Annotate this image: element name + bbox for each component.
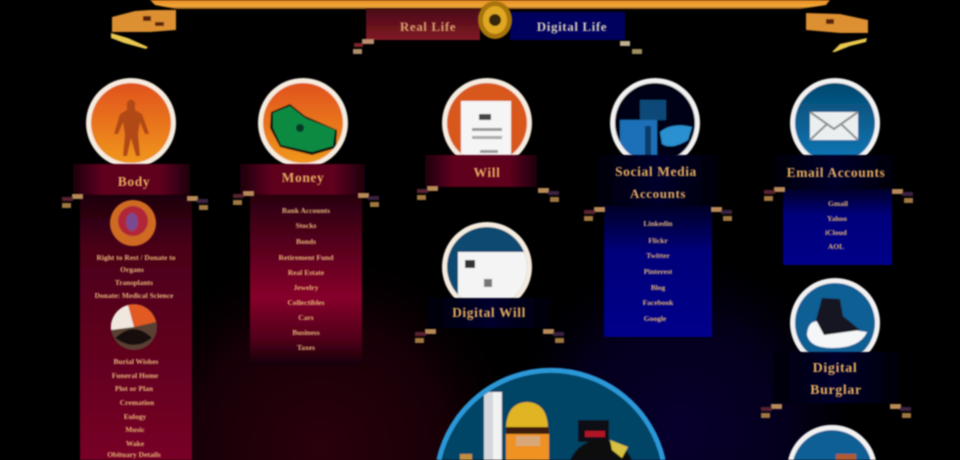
- text: money list: Bonds: [296, 237, 316, 246]
- ribbon: email accounts: [764, 155, 913, 203]
- small left figure: [460, 454, 472, 460]
- panel: will: [417, 78, 559, 202]
- text: email list: iCloud: [825, 228, 848, 237]
- icon: will document: [442, 78, 532, 168]
- icon: centre medallion: [478, 1, 512, 39]
- sword: [484, 392, 502, 460]
- ribbon: digital burglar: Digital: [813, 361, 857, 376]
- ribbon: will: Will: [474, 165, 500, 180]
- ribbon: money: Money: [282, 170, 324, 185]
- text: email list: [825, 199, 848, 251]
- text: money list: Real Estate: [288, 268, 325, 277]
- ribbon: body: Body: [118, 174, 150, 189]
- text: funeral list: Obituary Details: [107, 450, 161, 459]
- icon: cash stack: [258, 78, 348, 168]
- hero head: [506, 402, 548, 430]
- panel: money: [233, 78, 379, 365]
- tab: real life: Real Life: [400, 19, 456, 34]
- text: organ list: [95, 253, 176, 300]
- text: money list: Stocks: [296, 221, 316, 230]
- text: social list: Google: [644, 314, 667, 323]
- text: money list: Taxes: [297, 343, 315, 352]
- ribbon: social media accounts: Social Media: [615, 164, 697, 179]
- text: organ list: Organs: [120, 265, 144, 274]
- text: email list: AOL: [828, 242, 844, 251]
- ribbon: money: [233, 164, 379, 207]
- tab: digital life: [510, 12, 642, 54]
- text: funeral list: Funeral Home: [112, 371, 159, 380]
- text: funeral list: Eulogy: [124, 412, 146, 421]
- text: money list: Cars: [298, 313, 314, 322]
- text: funeral list: Wake: [126, 439, 145, 448]
- icon: body figure: [86, 78, 176, 168]
- panel: digital burglar: [761, 278, 911, 418]
- ribbon: social media accounts: Accounts: [630, 186, 686, 201]
- text: organ list: Transplants: [115, 278, 153, 287]
- ribbon: digital burglar: [761, 352, 911, 418]
- text: social list: Facebook: [643, 298, 674, 307]
- text: money list: Business: [292, 328, 320, 337]
- ribbon: digital will: [415, 298, 564, 343]
- panel: email accounts: [764, 78, 913, 265]
- text: funeral list: Burial Wishes: [114, 357, 159, 366]
- icon: burial: [111, 304, 157, 350]
- icon: envelope: [790, 78, 880, 168]
- icon: digital will window: [440, 220, 534, 300]
- text: funeral list: Plot or Plan: [115, 384, 154, 393]
- text: organ list: Right to Rest / Donate to: [97, 253, 176, 262]
- illustration: hero and villain: [439, 370, 663, 460]
- top banner: [111, 0, 868, 52]
- text: organ list: Donate: Medical Science: [95, 291, 174, 300]
- ribbon: will: [417, 155, 559, 202]
- panel: social media accounts: [584, 78, 732, 337]
- text: funeral list: Cremation: [120, 398, 155, 407]
- text: money list: Retirement Fund: [278, 253, 334, 262]
- tab: digital life: Digital Life: [537, 19, 607, 34]
- ribbon: body: [62, 164, 208, 210]
- icon: burglar on cloud: [790, 278, 880, 368]
- panel: body: [62, 78, 208, 460]
- text: email list: Gmail: [828, 199, 848, 208]
- text: social list: [643, 219, 674, 323]
- text: email list: Yahoo: [827, 214, 847, 223]
- text: money list: [278, 206, 334, 352]
- text: social list: Twitter: [646, 251, 670, 260]
- tab: real life: [353, 9, 480, 54]
- text: funeral list: Music: [125, 425, 145, 434]
- text: social list: Flickr: [648, 236, 668, 245]
- icon: lower right circle: [788, 425, 876, 460]
- text: money list: Jewelry: [294, 283, 319, 292]
- icon: social media logos: [610, 78, 700, 168]
- panel: digital will: [415, 222, 564, 343]
- ribbon: digital will: Digital Will: [452, 305, 526, 320]
- text: social list: Blog: [651, 283, 666, 292]
- ribbon: email accounts: Email Accounts: [787, 165, 885, 180]
- ribbon: digital burglar: Burglar: [810, 383, 862, 398]
- villain: [578, 420, 609, 442]
- text: social list: Linkedin: [643, 219, 673, 228]
- icon: organs: [110, 200, 156, 246]
- text: money list: Collectibles: [287, 298, 325, 307]
- text: money list: Bank Accounts: [282, 206, 330, 215]
- text: social list: Pinterest: [644, 267, 673, 276]
- ribbon: social media accounts: [584, 155, 732, 221]
- text: funeral list: [107, 357, 161, 459]
